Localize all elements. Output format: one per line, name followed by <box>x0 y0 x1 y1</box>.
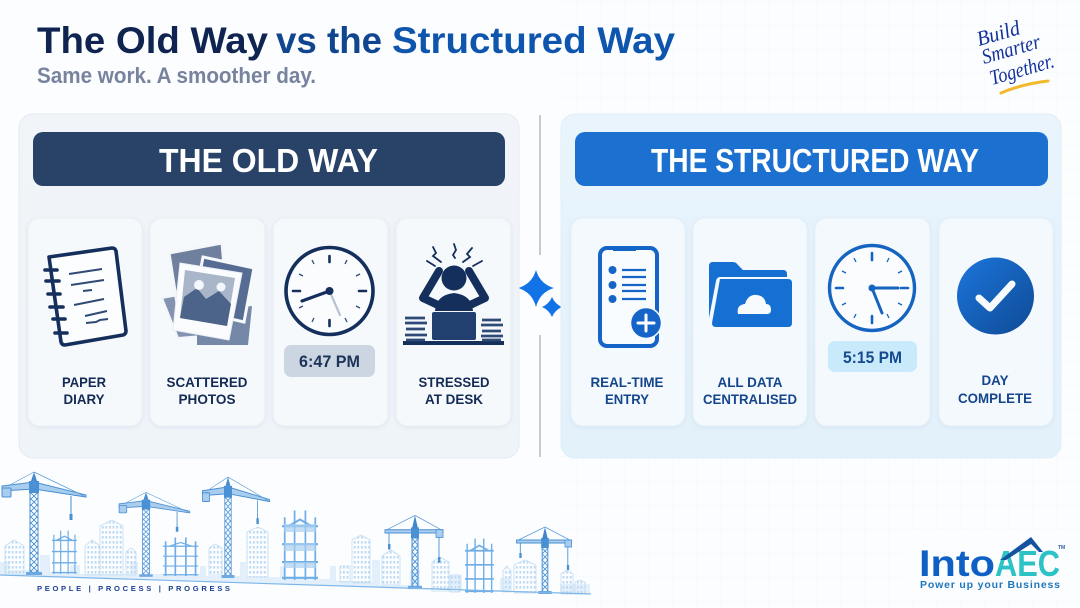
label: day complete: COMPLETE <box>958 390 1032 406</box>
header: the structured way <box>575 132 1048 186</box>
icon: stressed person <box>403 244 504 343</box>
card: stressed at desk <box>396 218 511 426</box>
label: stressed at desk: STRESSED <box>418 374 490 390</box>
time pill: 6:47 PM <box>284 345 375 377</box>
scaffolds <box>52 511 494 593</box>
motto: PEOPLE | PROCESS | PROGRESS <box>37 584 230 593</box>
card: day complete <box>939 218 1053 426</box>
label: day complete: DAY <box>982 372 1009 388</box>
header: the old way: THE OLD WAY <box>159 142 378 179</box>
buildings <box>5 520 585 594</box>
header: the old way <box>33 132 505 186</box>
subtitle: Same work. A smoother day. <box>37 63 316 88</box>
logo: IntoAEC: AEC <box>995 543 1060 584</box>
card: late clock <box>273 218 388 426</box>
label: paper diary <box>62 374 106 407</box>
tagline: Build Smarter Together: Together. <box>987 49 1057 90</box>
label: stressed at desk: AT DESK <box>425 391 483 407</box>
tagline: Build Smarter Together: Build <box>974 15 1023 51</box>
icon: photos <box>162 243 254 345</box>
icon: notebook <box>45 248 126 345</box>
tagline: Build Smarter Together: Smarter <box>979 29 1044 69</box>
card: all data centralised <box>693 218 807 426</box>
label: real-time entry: ENTRY <box>605 391 650 407</box>
icon: cloud folder <box>709 262 792 327</box>
icon: check circle <box>957 258 1034 334</box>
logo: IntoAEC <box>905 530 1075 596</box>
logo: IntoAEC: TM <box>1058 545 1065 551</box>
label: scattered photos: PHOTOS <box>178 391 236 407</box>
divider with sparkle <box>518 115 562 457</box>
icon: clock 6:47 <box>286 248 373 334</box>
label: scattered photos <box>166 374 248 407</box>
title: The Old Way <box>37 19 268 61</box>
card: early clock <box>815 218 930 426</box>
title: Structured Way <box>392 19 675 61</box>
label: all data centralised: CENTRALISED <box>703 391 797 407</box>
panel: structured way <box>561 114 1061 458</box>
ground line <box>0 575 591 594</box>
card: scattered photos <box>150 218 265 426</box>
time pill: 5:15 PM <box>828 341 917 372</box>
label: paper diary: PAPER <box>62 374 106 390</box>
label: stressed at desk <box>418 374 490 407</box>
label: real-time entry: REAL-TIME <box>590 374 664 390</box>
logo: IntoAEC: Power up your Business <box>920 579 1060 591</box>
tower cranes <box>2 472 572 594</box>
label: paper diary: DIARY <box>64 391 105 407</box>
header: the structured way: THE STRUCTURED WAY <box>651 142 979 179</box>
tagline: Build Smarter Together <box>974 15 1057 93</box>
card: paper diary <box>28 218 142 426</box>
time pill: 6:47 PM: 6:47 PM <box>299 352 360 371</box>
label: all data centralised: ALL DATA <box>718 374 782 390</box>
time pill: 5:15 PM: 5:15 PM <box>843 348 902 367</box>
icon: clock 5:15 <box>830 246 914 330</box>
icon: phone <box>600 247 662 346</box>
construction skyline <box>0 472 591 594</box>
title: vs the <box>276 19 382 61</box>
card: real-time entry <box>571 218 685 426</box>
distant skyline <box>0 555 590 594</box>
label: scattered photos: SCATTERED <box>166 374 248 390</box>
panel: old way <box>19 114 519 458</box>
label: real-time entry <box>590 374 664 407</box>
logo: IntoAEC: Into <box>919 543 995 584</box>
label: all data centralised <box>703 374 797 407</box>
label: day complete <box>958 372 1032 406</box>
